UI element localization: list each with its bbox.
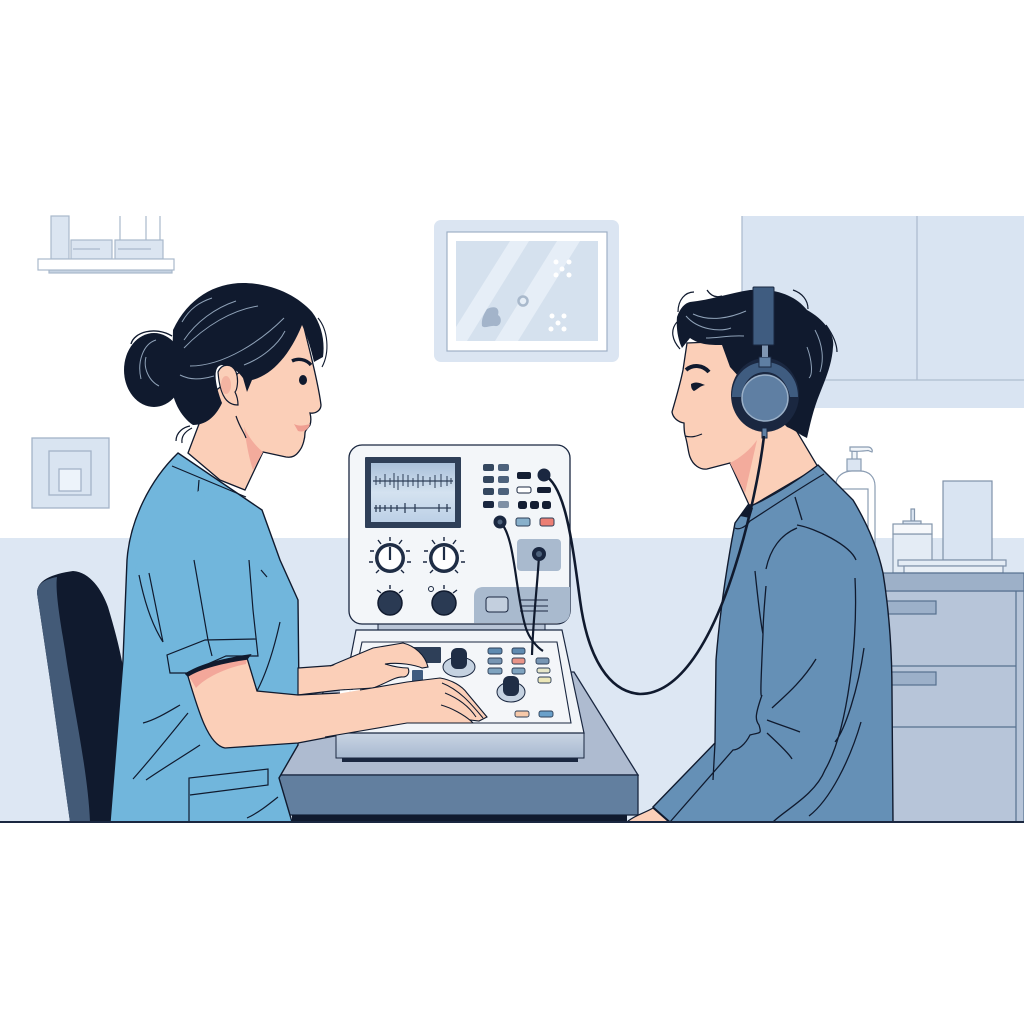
console buttons [488, 648, 553, 717]
wall shelf [38, 216, 174, 273]
patient collar opening [740, 505, 753, 518]
oscilloscope screen [365, 457, 461, 528]
patient hair strands [686, 311, 822, 378]
patient hand [627, 808, 669, 822]
lower right grey panel [474, 587, 570, 623]
cable from centre jack [532, 556, 539, 655]
nurse jaw line [236, 416, 246, 438]
nurse neck shadow [244, 427, 263, 470]
finger lines [441, 683, 483, 721]
patient loose hair outline [673, 290, 837, 352]
nurse far forearm [298, 643, 428, 695]
lower right knob [428, 585, 457, 615]
jacks [494, 468, 550, 561]
nurse uniform wrinkles [133, 705, 200, 780]
lower left knob [377, 585, 403, 615]
patient face and neck [672, 340, 818, 507]
nurse bun [124, 331, 184, 407]
nurse pupil [299, 375, 307, 385]
base cabinet [878, 573, 1024, 822]
patient pupil [691, 382, 705, 391]
chair [37, 571, 123, 822]
nurse hair strands [180, 298, 285, 379]
nurse sleeve seams [139, 560, 280, 691]
cable to headphones [544, 436, 764, 694]
cable from left jack [500, 522, 543, 651]
patient collar [735, 474, 824, 529]
tall box and tray [898, 481, 1006, 573]
upper button grid [483, 464, 554, 526]
nurse ear shade [221, 376, 231, 394]
audiometer control console [336, 733, 584, 762]
nurse sleeve shadow [186, 655, 250, 676]
dial right [423, 537, 465, 573]
jar on counter [893, 509, 932, 573]
audiometer upper unit [349, 445, 570, 624]
patient shirt [653, 465, 893, 822]
nurse near arm [187, 658, 487, 748]
nurse lower hand redraw [325, 678, 487, 737]
nurse sleeve [135, 490, 258, 673]
nurse neck and face [188, 323, 321, 490]
patient neck shadow [730, 440, 757, 493]
patient hair [677, 290, 833, 438]
upper wall cabinets [742, 216, 1024, 408]
nurse figure [110, 283, 487, 822]
headphones [731, 287, 799, 438]
patient figure [627, 287, 893, 822]
console knob one [443, 648, 475, 677]
console dark display [413, 647, 441, 663]
nurse ear [218, 365, 238, 405]
jack panel [517, 539, 561, 571]
nurse pocket [189, 769, 278, 822]
patient shirt folds [670, 497, 864, 822]
nurse uniform [110, 453, 299, 822]
nurse hair [171, 283, 324, 425]
framed wall square [32, 438, 109, 508]
window picture [434, 220, 619, 362]
nurse fringe outline [318, 318, 327, 367]
nurse eye and brow [292, 359, 311, 365]
patient mouth [685, 434, 702, 437]
nurse collar lines [172, 466, 246, 505]
table [279, 672, 638, 822]
nurse mouth [294, 424, 310, 432]
patient eye and brow [686, 366, 709, 372]
monitor unit stand [378, 622, 545, 632]
nurse upper hand redraw [330, 643, 428, 690]
console top [336, 630, 584, 733]
console inner panel [345, 642, 571, 723]
console knob two [497, 676, 525, 702]
floor line [0, 821, 1024, 823]
nurse stray hairs [176, 426, 192, 443]
nurse arm shadow [187, 658, 247, 688]
soap bottle [836, 447, 875, 560]
console sliders [340, 670, 423, 697]
dial left [369, 537, 411, 573]
